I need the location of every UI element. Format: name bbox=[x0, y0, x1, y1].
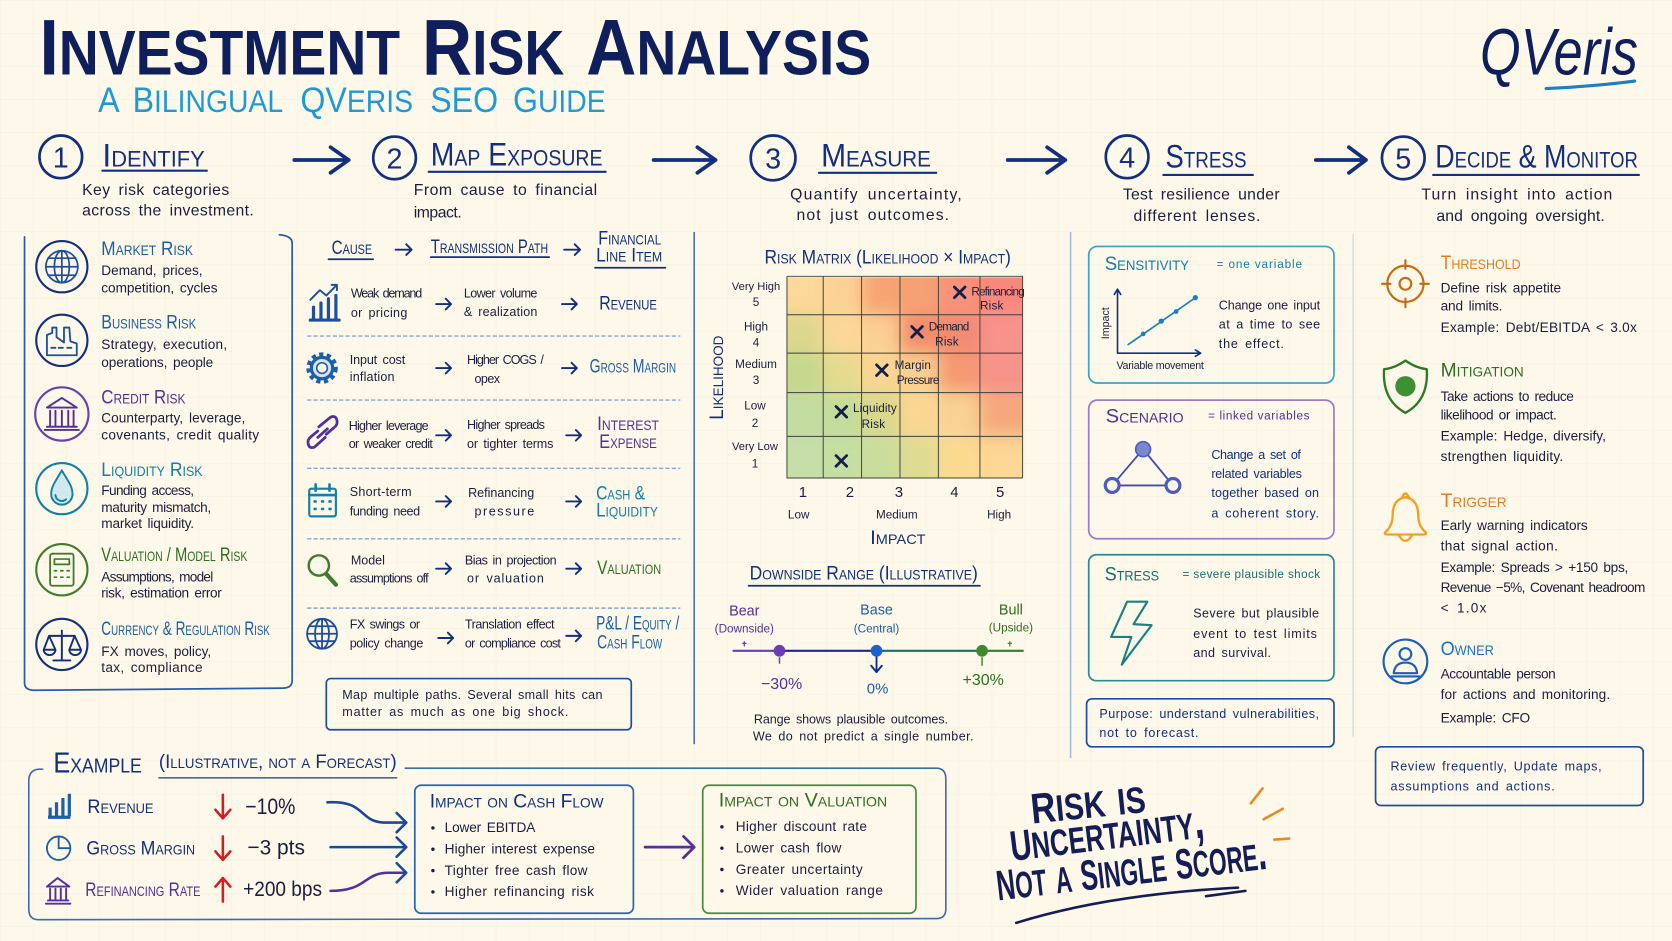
chart: risk matrix: Risk Matrix (Likelihood × Impact) bbox=[765, 247, 1011, 269]
threshold bbox=[1382, 252, 1637, 335]
table header: Financial bbox=[598, 227, 661, 249]
row: revenue: & realization bbox=[464, 305, 537, 319]
risk markers: Risk bbox=[862, 418, 885, 431]
row: interest expense: Higher leverage bbox=[349, 419, 429, 433]
valuation model risk: risk, estimation error bbox=[101, 585, 222, 600]
arrow: step 1 to 2 bbox=[294, 147, 349, 173]
callout: review: assumptions and actions. bbox=[1390, 780, 1555, 794]
step 3: measure: Measure bbox=[821, 137, 931, 173]
risk markers: Demand bbox=[929, 321, 969, 334]
liquidity risk: Liquidity Risk bbox=[101, 459, 203, 481]
row: p&l equity cash flow: P&L / Equity / bbox=[596, 612, 680, 634]
impact axis: 1 bbox=[799, 484, 807, 501]
step 5: decide and monitor: Turn insight into action bbox=[1421, 187, 1612, 204]
panel: sensitivity: Sensitivity bbox=[1105, 253, 1190, 275]
impact on valuation: Wider valuation range bbox=[736, 883, 883, 898]
table header: Cause bbox=[332, 237, 372, 259]
step 4: stress: Stress bbox=[1165, 138, 1247, 175]
arrow: step 3 to 4 bbox=[1008, 147, 1065, 173]
chart: downside range bbox=[715, 562, 1033, 743]
likelihood axis: Low bbox=[744, 400, 766, 413]
callout: risk is uncertainty: Risk is bbox=[1027, 765, 1148, 836]
row: cash and liquidity: Short-term bbox=[350, 485, 412, 499]
row: cash and liquidity: pressure bbox=[475, 504, 534, 518]
refinancing rate row: Refinancing Rate bbox=[85, 879, 200, 901]
step 5: decide and monitor: Decide & Monitor bbox=[1435, 138, 1638, 175]
revenue row: −10% bbox=[245, 794, 295, 819]
row: interest expense: or weaker credit bbox=[349, 437, 433, 451]
trigger: Example: Spreads > +150 bps, bbox=[1441, 560, 1628, 575]
panel: stress: Severe but plausible bbox=[1193, 607, 1319, 621]
row: p&l equity cash flow: Translation effect bbox=[465, 617, 555, 631]
step 2: map exposure: 2 bbox=[387, 144, 403, 176]
callout: map multiple paths bbox=[326, 679, 631, 730]
market risk: Market Risk bbox=[101, 238, 194, 260]
likelihood axis bbox=[706, 281, 780, 470]
step 1: identify: Identify bbox=[102, 137, 205, 173]
step 4: stress: 4 bbox=[1119, 142, 1135, 175]
threshold: Example: Debt/EBITDA < 3.0x bbox=[1441, 320, 1637, 335]
linked nodes diagram bbox=[1105, 442, 1180, 492]
step 1: identify: 1 bbox=[53, 142, 69, 175]
subtitle: A Bilingual QVeris SEO Guide bbox=[98, 72, 606, 122]
row: interest expense: Expense bbox=[599, 431, 657, 453]
callout: purpose: not to forecast. bbox=[1099, 726, 1199, 740]
step 2: map exposure: From cause to financial bbox=[414, 182, 597, 199]
risk markers: Refinancing bbox=[971, 286, 1025, 299]
chart: risk matrix bbox=[710, 250, 1024, 544]
chart: downside range: Bull bbox=[999, 603, 1023, 619]
callout: risk is uncertainty: Uncertainty, bbox=[1006, 791, 1207, 873]
panel: example: Example bbox=[53, 747, 142, 779]
threshold: Define risk appetite bbox=[1441, 280, 1561, 295]
trigger: < 1.0x bbox=[1441, 600, 1487, 615]
risk markers: Pressure bbox=[897, 374, 939, 387]
panel: scenario: a coherent story. bbox=[1211, 506, 1319, 520]
row: gross margin bbox=[308, 353, 676, 386]
risk markers: Risk bbox=[935, 336, 959, 349]
step 1: identify: Key risk categories bbox=[82, 182, 229, 199]
business risk: Business Risk bbox=[101, 312, 197, 334]
chart: downside range: Downside Range (Illustrative) bbox=[750, 562, 978, 584]
currency and regulation risk: tax, compliance bbox=[101, 660, 203, 675]
impact on valuation: Greater uncertainty bbox=[736, 862, 863, 877]
business risk: Strategy, execution, bbox=[101, 337, 227, 352]
impact on valuation bbox=[703, 785, 916, 913]
chart: downside range: (Upside) bbox=[989, 622, 1033, 635]
valuation model risk: Assumptions, model bbox=[101, 569, 213, 584]
impact axis: 4 bbox=[950, 484, 959, 501]
revenue row bbox=[48, 794, 295, 819]
valuation model risk bbox=[36, 544, 248, 600]
risk markers: Liquidity bbox=[853, 402, 897, 415]
chart: downside range: We do not predict a single number. bbox=[753, 729, 974, 743]
threshold: Threshold bbox=[1441, 252, 1521, 274]
row: p&l equity cash flow: policy change bbox=[350, 637, 423, 651]
impact axis: Low bbox=[788, 509, 810, 522]
callout: risk is uncertainty: Not a Single Score. bbox=[993, 822, 1270, 912]
row: revenue: Lower volume bbox=[464, 287, 537, 301]
threshold: and limits. bbox=[1441, 298, 1502, 313]
row: cash and liquidity: Liquidity bbox=[596, 499, 658, 521]
currency and regulation risk: Currency & Regulation Risk bbox=[101, 618, 270, 640]
row: valuation: Valuation bbox=[597, 557, 661, 579]
impact on valuation: Lower cash flow bbox=[736, 840, 841, 855]
step 3: measure bbox=[751, 135, 962, 224]
market risk: Demand, prices, bbox=[101, 263, 203, 278]
impact axis: 3 bbox=[895, 484, 903, 501]
chart: downside range: Base bbox=[860, 603, 893, 619]
step 5: decide and monitor: 5 bbox=[1395, 144, 1411, 176]
row: valuation: Model bbox=[351, 553, 385, 567]
likelihood axis: 4 bbox=[753, 337, 760, 350]
row: gross margin: inflation bbox=[350, 370, 395, 384]
step 1: identify: across the investment. bbox=[82, 203, 254, 220]
chart: downside range: +30% bbox=[962, 672, 1004, 689]
sensitivity chart bbox=[1100, 289, 1204, 372]
impact axis: 2 bbox=[846, 484, 854, 501]
owner bbox=[1384, 638, 1610, 725]
owner: Example: CFO bbox=[1441, 710, 1530, 725]
likelihood axis: Very High bbox=[732, 281, 780, 293]
liquidity risk bbox=[36, 459, 211, 531]
row: revenue: or pricing bbox=[351, 306, 407, 320]
liquidity risk: market liquidity. bbox=[101, 516, 194, 531]
trigger: Trigger bbox=[1441, 490, 1507, 512]
row: valuation: Bias in projection bbox=[465, 553, 557, 567]
chart: downside range: (Central) bbox=[854, 623, 899, 636]
row: p&l equity cash flow bbox=[307, 612, 680, 654]
row: interest expense: or tighter terms bbox=[467, 437, 553, 451]
row: p&l equity cash flow: FX swings or bbox=[350, 617, 420, 631]
row: valuation: or valuation bbox=[467, 572, 544, 586]
chart: downside range: (Downside) bbox=[715, 623, 774, 636]
trigger: that signal action. bbox=[1441, 539, 1558, 554]
row: cash and liquidity: funding need bbox=[350, 504, 420, 518]
callout: purpose bbox=[1087, 699, 1334, 747]
revenue row: Revenue bbox=[87, 796, 154, 818]
mitigation: likelihood or impact. bbox=[1441, 407, 1557, 422]
impact axis: Impact bbox=[870, 527, 926, 549]
row: cash and liquidity bbox=[309, 482, 658, 521]
panel: exposure map bbox=[307, 227, 680, 730]
table header: Transmission Path bbox=[431, 236, 548, 258]
owner: Owner bbox=[1441, 638, 1494, 660]
panel: stress bbox=[1089, 555, 1334, 681]
gross margin row: Gross Margin bbox=[86, 838, 195, 860]
likelihood axis: Medium bbox=[735, 358, 777, 371]
currency and regulation risk: FX moves, policy, bbox=[101, 644, 211, 659]
likelihood axis: Likelihood bbox=[706, 336, 728, 420]
impact on cash flow: Higher refinancing risk bbox=[445, 884, 594, 899]
step 4: stress: Test resilience under bbox=[1123, 187, 1280, 204]
panel: sensitivity: = one variable bbox=[1217, 258, 1302, 271]
impact on valuation: Higher discount rate bbox=[736, 819, 867, 834]
mitigation bbox=[1384, 360, 1606, 464]
chart: downside range: −30% bbox=[761, 676, 802, 693]
impact axis bbox=[788, 484, 1011, 549]
impact on cash flow: Higher interest expense bbox=[445, 842, 595, 857]
arrow to valuation bbox=[645, 836, 694, 858]
step 1: identify bbox=[39, 135, 254, 220]
valuation model risk: Valuation / Model Risk bbox=[101, 544, 248, 566]
icon: lightning bolt bbox=[1111, 602, 1152, 665]
mitigation: Example: Hedge, diversify, bbox=[1441, 429, 1606, 444]
panel: example: (Illustrative, not a Forecast) bbox=[159, 751, 397, 773]
business risk bbox=[36, 312, 227, 370]
step 3: measure: not just outcomes. bbox=[797, 207, 949, 224]
arrows into cash flow bbox=[327, 802, 406, 891]
refinancing rate row bbox=[46, 877, 322, 904]
panel: stress: and survival. bbox=[1193, 646, 1271, 660]
arrow: step 4 to 5 bbox=[1316, 147, 1366, 173]
credit risk: Credit Risk bbox=[101, 386, 186, 408]
impact axis: Medium bbox=[876, 509, 918, 522]
row: revenue: Revenue bbox=[599, 292, 657, 314]
panel: scenario bbox=[1089, 400, 1334, 539]
row: gross margin: Higher COGS / bbox=[467, 353, 544, 367]
panel: scenario: Scenario bbox=[1106, 405, 1184, 427]
liquidity risk: maturity mismatch, bbox=[101, 500, 211, 515]
impact on cash flow: Tighter free cash flow bbox=[445, 863, 588, 878]
panel: scenario: Change a set of bbox=[1211, 448, 1301, 462]
credit risk: covenants, credit quality bbox=[101, 428, 259, 443]
credit risk bbox=[35, 386, 259, 443]
arrow: step 2 to 3 bbox=[654, 147, 716, 173]
step 3: measure: 3 bbox=[765, 144, 781, 176]
step 2: map exposure: impact. bbox=[414, 205, 462, 222]
table header: Line Item bbox=[596, 244, 662, 266]
risk markers: Margin bbox=[895, 359, 931, 372]
impact on valuation: Impact on Valuation bbox=[719, 790, 887, 812]
row: interest expense bbox=[308, 413, 659, 453]
mitigation: Take actions to reduce bbox=[1441, 389, 1574, 404]
chart: downside range: 0% bbox=[867, 680, 888, 697]
panel: sensitivity: the effect. bbox=[1219, 337, 1284, 351]
mitigation: strengthen liquidity. bbox=[1441, 449, 1563, 464]
panel: decide and monitor bbox=[1376, 252, 1645, 806]
risk markers: Risk bbox=[980, 299, 1004, 312]
likelihood axis: 3 bbox=[753, 374, 759, 387]
owner: for actions and monitoring. bbox=[1441, 687, 1610, 702]
row: valuation: assumptions off bbox=[350, 572, 429, 586]
panel: risk categories bbox=[25, 235, 292, 690]
row: p&l equity cash flow: or compliance cost bbox=[465, 637, 561, 651]
liquidity risk: Funding access, bbox=[101, 483, 194, 498]
panel: scenario: related variables bbox=[1211, 467, 1302, 481]
panel: sensitivity bbox=[1089, 246, 1334, 383]
row: gross margin: opex bbox=[475, 372, 501, 386]
panel: stress: = severe plausible shock bbox=[1183, 568, 1320, 581]
step 5: decide and monitor: and ongoing oversight. bbox=[1436, 208, 1605, 225]
market risk: competition, cycles bbox=[101, 280, 218, 295]
impact on cash flow: Impact on Cash Flow bbox=[430, 791, 604, 813]
callout: map multiple paths: Map multiple paths. Several small hits can bbox=[342, 688, 602, 702]
row: p&l equity cash flow: Cash Flow bbox=[597, 632, 663, 654]
risk markers bbox=[836, 286, 1025, 466]
chart: downside range: Bear bbox=[729, 604, 760, 620]
panel: stress: event to test limits bbox=[1193, 627, 1317, 641]
gross margin row: −3 pts bbox=[247, 836, 305, 860]
step 3: measure: Quantify uncertainty, bbox=[790, 187, 962, 204]
currency and regulation risk bbox=[36, 618, 270, 675]
row: revenue: Weak demand bbox=[351, 287, 422, 301]
step 5: decide and monitor bbox=[1382, 137, 1639, 225]
chart: downside range: Range shows plausible outcomes. bbox=[754, 712, 948, 726]
row: cash and liquidity: Cash & bbox=[596, 482, 645, 504]
owner: Accountable person bbox=[1441, 667, 1556, 682]
business risk: operations, people bbox=[101, 355, 213, 370]
row: gross margin: Input cost bbox=[350, 353, 406, 367]
impact on cash flow: Lower EBITDA bbox=[445, 820, 536, 835]
likelihood axis: 2 bbox=[752, 417, 758, 430]
refinancing rate row: +200 bps bbox=[243, 877, 322, 901]
likelihood axis: 1 bbox=[752, 457, 758, 470]
panel: scenario: together based on bbox=[1211, 486, 1319, 500]
step 2: map exposure: Map Exposure bbox=[431, 136, 602, 172]
callout: map multiple paths: matter as much as one big shock. bbox=[342, 705, 568, 719]
market risk bbox=[36, 238, 218, 295]
trigger bbox=[1385, 490, 1645, 615]
row: revenue bbox=[310, 285, 657, 320]
impact axis: 5 bbox=[996, 484, 1004, 501]
row: interest expense: Higher spreads bbox=[467, 418, 545, 432]
likelihood axis: High bbox=[744, 321, 768, 334]
sensitivity chart: Impact bbox=[1100, 307, 1112, 339]
callout: purpose: Purpose: understand vulnerabilities, bbox=[1099, 707, 1319, 721]
panel: stress: Stress bbox=[1105, 563, 1159, 585]
step 4: stress bbox=[1106, 135, 1280, 225]
panel: sensitivity: at a time to see bbox=[1219, 318, 1320, 332]
trigger: Early warning indicators bbox=[1441, 518, 1588, 533]
callout: risk is uncertainty bbox=[993, 765, 1289, 923]
mitigation: Mitigation bbox=[1441, 360, 1524, 382]
panel: sensitivity: Change one input bbox=[1219, 298, 1321, 312]
likelihood axis: Very Low bbox=[732, 441, 779, 453]
callout: review bbox=[1376, 747, 1643, 806]
row: interest expense: Interest bbox=[597, 413, 659, 435]
likelihood axis: 5 bbox=[753, 296, 760, 309]
panel: scenario: = linked variables bbox=[1208, 409, 1310, 422]
trigger: Revenue −5%, Covenant headroom bbox=[1441, 580, 1645, 595]
impact axis: High bbox=[987, 509, 1011, 522]
table header bbox=[328, 227, 665, 268]
callout: review: Review frequently, Update maps, bbox=[1390, 759, 1602, 773]
step 2: map exposure bbox=[373, 136, 606, 222]
credit risk: Counterparty, leverage, bbox=[101, 410, 245, 425]
row: cash and liquidity: Refinancing bbox=[468, 486, 534, 500]
step 4: stress: different lenses. bbox=[1134, 208, 1260, 225]
sensitivity chart: Variable movement bbox=[1116, 360, 1204, 372]
row: gross margin: Gross Margin bbox=[590, 355, 676, 377]
panel: example bbox=[29, 747, 946, 920]
row: valuation bbox=[309, 553, 661, 586]
impact on cash flow bbox=[415, 785, 633, 913]
gross margin row bbox=[47, 836, 305, 860]
